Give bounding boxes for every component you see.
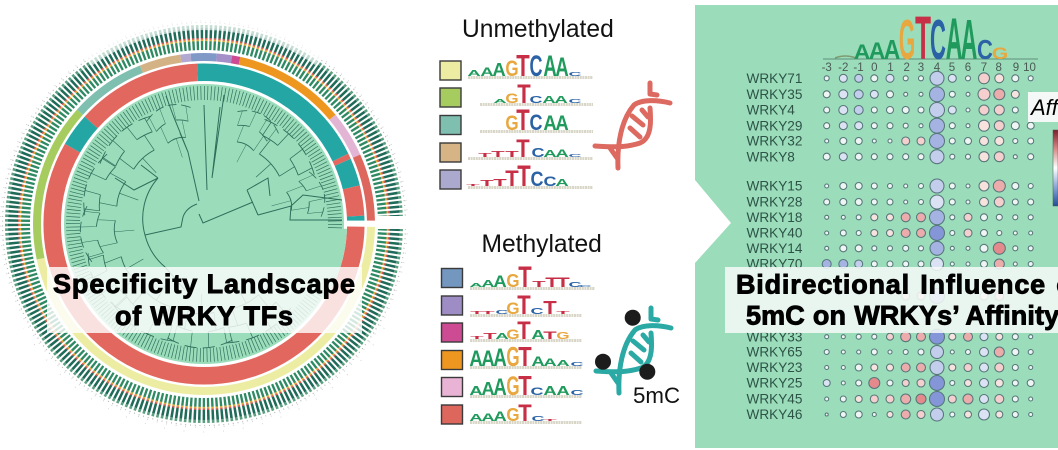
methylated sequence logos: A: [481, 279, 495, 290]
methylated sequence logos: T: [470, 311, 484, 315]
methylated sequence logos: A: [543, 385, 557, 398]
motif position axis: 0: [871, 62, 878, 74]
methylated sequence logos: T: [543, 299, 557, 318]
methylated sequence logos: A: [556, 359, 570, 368]
panel: circular phylogeny: [1, 21, 408, 432]
motif position axis: -2: [838, 62, 848, 74]
unmethylated sequence logos: A: [555, 112, 569, 135]
methylated sequence logos: C: [578, 284, 592, 288]
unmethylated sequence logos: G: [505, 112, 519, 135]
methylated sequence logos: A: [481, 348, 495, 371]
WRKY row labels: WRKY14: [746, 241, 803, 256]
WRKY row labels: WRKY32: [746, 134, 802, 149]
unmethylated sequence logos: T: [505, 166, 519, 191]
WRKY row labels: WRKY15: [746, 179, 802, 194]
outer annotation ring: [37, 57, 371, 391]
methylated sequence logos: A: [531, 354, 545, 369]
motif logo: consensus: G: [899, 9, 915, 72]
unmethylated sequence logos: G: [505, 57, 519, 82]
motif logo: consensus: A: [946, 8, 962, 72]
WRKY row labels: WRKY45: [746, 392, 802, 407]
methylated sequence logos: T: [481, 311, 495, 315]
WRKY row labels: WRKY40: [746, 226, 803, 241]
methylated sequence logos: A: [469, 385, 483, 398]
heading: unmethylated: Unmethylated: [462, 16, 614, 43]
unmethylated sequence logos: A: [542, 95, 556, 106]
unmethylated sequence logos: T: [505, 150, 519, 159]
unmethylated sequence logos: T: [491, 150, 505, 159]
motif position axis: 9: [1013, 62, 1019, 74]
WRKY row labels: [746, 71, 803, 422]
panel: affinity background with arrow notch: [695, 5, 1058, 448]
methylated sequence logos: A: [469, 413, 483, 424]
motif position axis: 5: [949, 62, 955, 74]
motif position axis: 1: [887, 62, 894, 74]
WRKY row labels: WRKY4: [746, 103, 795, 118]
unmethylated sequence logos: A: [555, 52, 569, 82]
motif logo: consensus: C: [977, 35, 993, 66]
WRKY row labels: WRKY29: [746, 118, 802, 133]
unmethylated sequence logos: C: [569, 98, 582, 104]
methylated sequence logos: G: [556, 330, 570, 341]
methylated sequence logos: T: [556, 274, 571, 290]
unmethylated sequence logos: T: [516, 135, 530, 162]
motif logo: consensus: A: [961, 9, 977, 72]
methylated sequence logos: A: [493, 409, 507, 424]
unmethylated sequence logos: A: [554, 95, 568, 106]
unmethylated sequence logos: T: [480, 179, 494, 188]
unmethylated sequence logos: C: [530, 51, 542, 83]
heading: methylated: Methylated: [482, 231, 602, 258]
unmethylated sequence logos: G: [505, 91, 519, 107]
methylated sequence logos: G: [506, 341, 520, 372]
methylated sequence logos: T: [556, 311, 570, 315]
methylated sequence logos: G: [506, 271, 520, 291]
title band: bidirectional influence: [725, 267, 1058, 333]
motif position axis: -3: [822, 62, 832, 74]
methylated legend swatches: [442, 268, 462, 424]
motif logo: consensus: A: [854, 40, 870, 64]
methylated sequence logos: T: [545, 274, 560, 290]
unmethylated sequence logos: A: [543, 149, 557, 160]
methylated sequence logos: A: [493, 272, 507, 291]
WRKY row labels: WRKY18: [746, 210, 802, 225]
unmethylated sequence logos: T: [517, 80, 531, 110]
motif position axis: 10: [1023, 62, 1036, 74]
WRKY row labels: WRKY70: [746, 257, 803, 272]
title text: of WRKY TFs: [115, 301, 293, 331]
WRKY row labels: WRKY8: [746, 149, 795, 164]
methylated sequence logos: C: [496, 309, 509, 315]
icon: methylated DNA helix with 5mC marks: [595, 308, 671, 393]
unmethylated sequence logos: T: [493, 177, 508, 188]
motif position axis: 4: [934, 62, 941, 74]
unmethylated sequence logos: T: [516, 48, 530, 83]
methylated sequence logos: T: [518, 371, 532, 402]
WRKY row labels: WRKY23: [746, 360, 802, 375]
motif logo: consensus: A: [869, 38, 885, 64]
methylated sequence logos: [469, 262, 595, 426]
methylated sequence logos: G: [506, 405, 520, 425]
unmethylated sequence logos: T: [516, 105, 530, 137]
title text: Specificity Landscape: [53, 269, 355, 299]
methylated sequence logos: A: [481, 378, 495, 399]
unmethylated sequence logos: [466, 48, 593, 193]
WRKY row labels: WRKY65: [746, 345, 802, 360]
unmethylated sequence logos: C: [530, 111, 543, 135]
icon: unmethylated DNA helix: [595, 83, 670, 168]
legend: colour bar: [1053, 130, 1058, 206]
label: 5mC: 5mC: [633, 383, 680, 408]
unmethylated sequence logos: T: [517, 161, 531, 193]
methylated sequence logos: A: [469, 282, 483, 288]
methylated sequence logos: G: [506, 327, 520, 343]
unmethylated sequence logos: T: [466, 184, 480, 187]
methylated sequence logos: C: [530, 306, 544, 316]
methylated sequence logos: T: [532, 280, 546, 289]
unmethylated sequence logos: A: [493, 98, 507, 104]
methylated sequence logos: T: [517, 291, 531, 321]
methylated sequence logos: T: [543, 329, 557, 342]
motif position axis: 6: [965, 62, 971, 74]
unmethylated sequence logos: C: [530, 95, 543, 106]
motif position axis: [822, 62, 1036, 74]
unmethylated legend swatches: [440, 61, 461, 189]
unmethylated sequence logos: T: [478, 152, 492, 158]
methylated sequence logos: A: [469, 348, 483, 371]
motif position axis: 8: [995, 62, 1002, 74]
unmethylated sequence logos: A: [555, 178, 569, 189]
motif logo: consensus: [823, 3, 1038, 72]
methylated sequence logos: T: [483, 332, 497, 341]
unmethylated sequence logos: A: [492, 59, 506, 80]
motif position axis: -1: [853, 62, 864, 74]
methylated sequence logos: T: [518, 399, 532, 426]
methylated sequence logos: G: [506, 371, 520, 401]
unmethylated sequence logos: A: [480, 66, 494, 79]
WRKY row labels: WRKY33: [746, 329, 802, 344]
motif position axis: 2: [903, 62, 910, 74]
methylated sequence logos: A: [556, 385, 570, 398]
unmethylated sequence logos: C: [569, 153, 582, 158]
methylated sequence logos: C: [569, 281, 582, 289]
title text: 5mC on WRKYs’ Affinity: [746, 300, 1058, 330]
bubble matrix: affinity change: [822, 71, 1034, 421]
methylated sequence logos: A: [495, 332, 509, 341]
motif logo: consensus: T: [915, 3, 931, 72]
methylated sequence logos: T: [470, 336, 484, 340]
motif position axis: 3: [918, 62, 924, 74]
WRKY row labels: WRKY25: [746, 376, 802, 391]
unmethylated sequence logos: C: [531, 168, 543, 191]
WRKY row labels: WRKY46: [746, 407, 802, 422]
methylated sequence logos: T: [518, 342, 532, 373]
methylated sequence logos: T: [518, 262, 532, 294]
unmethylated sequence logos: C: [569, 71, 582, 77]
methylated sequence logos: A: [531, 329, 545, 342]
methylated sequence logos: A: [543, 357, 557, 369]
methylated sequence logos: A: [493, 343, 507, 372]
outer radial tick bars: [1, 21, 407, 432]
motif logo: consensus: C: [930, 9, 946, 72]
title band: specificity landscape: [47, 267, 363, 333]
methylated sequence logos: C: [531, 385, 544, 398]
phylogenetic tree: [64, 84, 344, 364]
methylated sequence logos: G: [506, 299, 520, 318]
methylated sequence logos: A: [481, 412, 495, 424]
unmethylated sequence logos: A: [543, 112, 557, 135]
motif logo: consensus: A: [884, 35, 900, 66]
methylated sequence logos: C: [571, 361, 584, 367]
motif logo: consensus: G: [992, 45, 1008, 63]
methylated sequence logos: C: [571, 389, 584, 397]
methylated sequence logos: T: [517, 317, 531, 344]
WRKY row labels: WRKY28: [746, 195, 802, 210]
motif position axis: 7: [981, 62, 987, 74]
methylated sequence logos: T: [543, 419, 557, 422]
unmethylated sequence logos: A: [467, 69, 481, 78]
unmethylated sequence logos: A: [543, 51, 557, 83]
WRKY row labels: WRKY71: [746, 71, 802, 86]
inner clade ring: [52, 72, 356, 376]
unmethylated sequence logos: C: [543, 174, 557, 189]
methylated sequence logos: C: [532, 415, 545, 423]
WRKY row labels: WRKY35: [746, 87, 802, 102]
unmethylated sequence logos: A: [555, 148, 569, 160]
methylated sequence logos: A: [493, 375, 507, 401]
unmethylated sequence logos: C: [532, 147, 544, 160]
